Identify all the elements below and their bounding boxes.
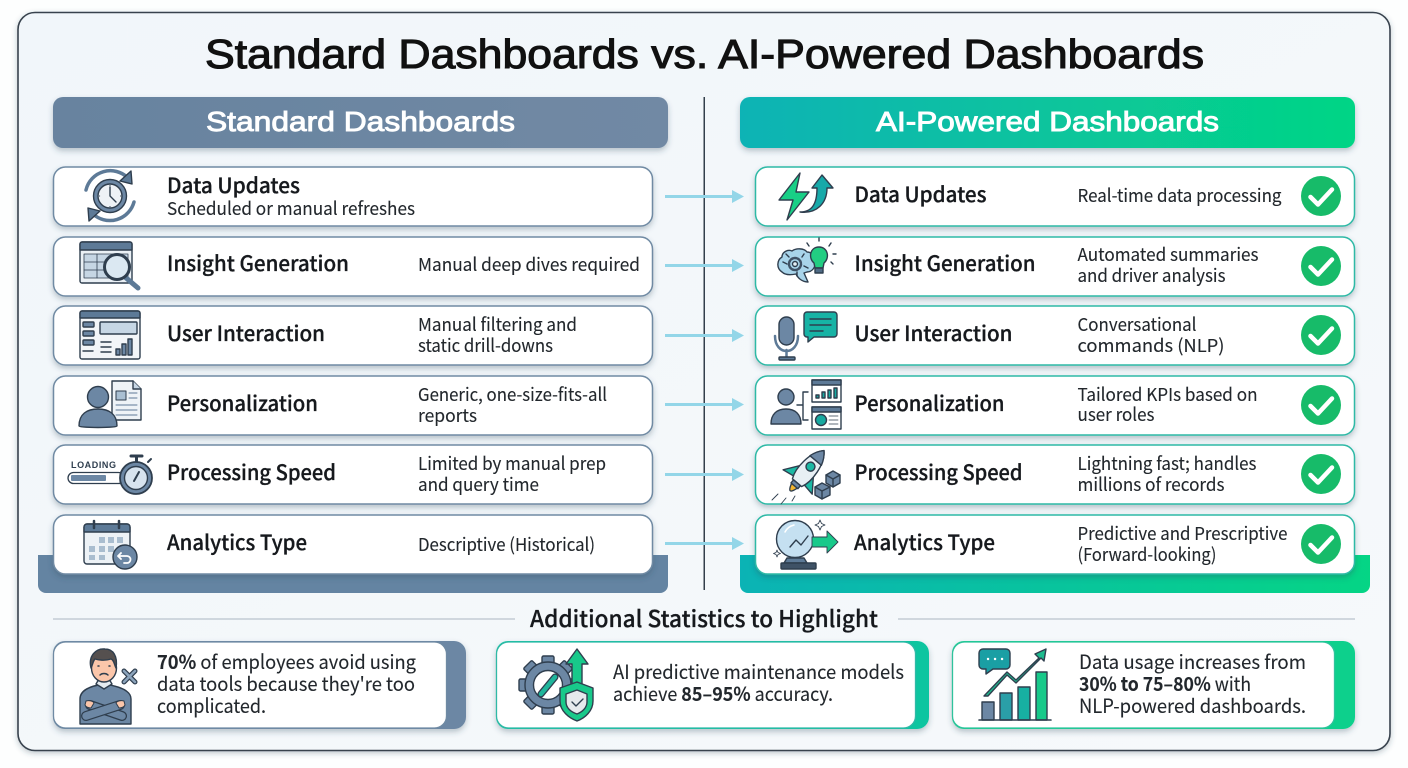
stat text: 70% of employees avoid using (157, 646, 416, 675)
row: user interaction (standard) (54, 306, 652, 365)
row: insight generation (standard) (54, 237, 652, 296)
icon: check mark (1301, 246, 1341, 286)
stat text: complicated. (157, 690, 266, 719)
icon: rocket and cubes (772, 438, 840, 504)
description: Descriptive (Historical) (418, 531, 595, 557)
label: personalization: Personalization (167, 388, 318, 418)
heading: AI-powered dashboards: AI-Powered Dashboards (876, 106, 1219, 137)
icon: brain with light bulb (778, 238, 836, 282)
description: (Forward-looking) (1078, 541, 1216, 567)
icon: check mark (1301, 315, 1341, 355)
description: reports (418, 402, 477, 428)
description (418, 311, 577, 358)
label: processing speed: Processing Speed (854, 457, 1022, 487)
label: analytics type: Analytics Type (854, 527, 995, 557)
icon: crystal ball with forecast arrow (774, 520, 838, 569)
icon: lightning bolt and arrow (779, 173, 833, 220)
row: personalization (standard) (54, 376, 652, 435)
description (1078, 381, 1258, 427)
description: Manual filtering and (418, 311, 577, 337)
stat text (157, 646, 416, 719)
label: analytics type: Analytics Type (167, 527, 307, 557)
stat text (613, 656, 904, 707)
row: data updates (AI) (756, 167, 1354, 226)
label: processing speed: Processing Speed (167, 457, 336, 487)
description: Generic, one-size-fits-all (418, 381, 607, 407)
label: data updates: Data Updates (854, 179, 986, 209)
label: insight generation: Insight Generation (854, 248, 1036, 278)
icon: microphone and chat bubble (775, 312, 837, 360)
description: Scheduled or manual refreshes (167, 195, 415, 221)
description (1078, 241, 1258, 288)
panel: AI-powered dashboards column (740, 97, 1370, 593)
description (418, 381, 607, 428)
stat text: NLP-powered dashboards. (1079, 690, 1306, 719)
icon: check mark (1301, 454, 1341, 494)
stat text: achieve 85–95% accuracy. (613, 678, 833, 707)
icon: rising bar chart with chat bubble (979, 649, 1051, 720)
panel: standard dashboards column (38, 97, 668, 593)
arrow: row 6 (665, 537, 744, 550)
arrows: standard to AI (665, 190, 744, 550)
description (1078, 450, 1256, 497)
row: insight generation (AI) (756, 237, 1354, 296)
arrow: row 5 (665, 468, 744, 481)
description: Conversational (1078, 311, 1196, 337)
column base: AI (740, 555, 1370, 593)
column base: standard (38, 555, 668, 593)
label: data updates: Data Updates (167, 170, 300, 200)
arrow: row 4 (665, 398, 744, 411)
row: analytics type (AI) (756, 515, 1354, 574)
arrow: row 3 (665, 329, 744, 342)
description: Limited by manual prep (418, 450, 606, 476)
description: Real-time data processing (1078, 182, 1282, 208)
description: Automated summaries (1078, 241, 1258, 267)
icon: dashboard window (80, 311, 140, 359)
icon: loading bar with stopwatch: LOADING (71, 460, 116, 470)
description: user roles (1078, 401, 1154, 427)
description: commands (NLP) (1078, 332, 1224, 358)
description (418, 450, 606, 497)
description: Lightning fast; handles (1078, 450, 1256, 476)
description: and driver analysis (1078, 262, 1226, 288)
stat text: AI predictive maintenance models (613, 656, 904, 685)
heading: AI-powered dashboards (740, 97, 1355, 148)
row: user interaction (AI) (756, 306, 1354, 365)
description: Tailored KPIs based on (1078, 381, 1258, 407)
description: and query time (418, 471, 539, 497)
icon: person with tailored panels (771, 380, 841, 429)
description: Manual deep dives required (418, 251, 640, 277)
description: millions of records (1078, 471, 1224, 497)
icon: loading bar with stopwatch (68, 456, 152, 494)
description (1078, 520, 1288, 567)
arrow: row 1 (665, 190, 744, 203)
description (1078, 311, 1224, 358)
label: insight generation: Insight Generation (167, 248, 349, 278)
arrow: row 2 (665, 259, 744, 272)
heading: standard dashboards (53, 97, 668, 148)
stat card: employees avoid data tools (53, 641, 466, 729)
center divider line (704, 97, 705, 590)
label: user interaction: User Interaction (167, 318, 325, 348)
icon: gear with wrench, arrow and shield (519, 649, 593, 721)
icon: check mark (1301, 176, 1341, 216)
stat text: Data usage increases from (1079, 646, 1306, 675)
stat text: data tools because they're too (157, 668, 415, 697)
row: processing speed (standard) (54, 445, 652, 504)
label: personalization: Personalization (854, 388, 1004, 418)
heading: additional statistics: Additional Statistics to Highlight (530, 600, 878, 634)
row: data updates (standard) (54, 167, 652, 226)
description: Predictive and Prescriptive (1078, 520, 1288, 546)
stat card: predictive maintenance accuracy (496, 641, 929, 729)
row: analytics type (standard) (54, 515, 652, 574)
icon: person with document (79, 381, 141, 428)
icon: frustrated person with crossed arms (80, 649, 135, 724)
icon: table with magnifier (80, 242, 138, 288)
stat text (1079, 646, 1306, 719)
stat card: data usage increase (952, 641, 1355, 729)
row: processing speed (AI) (756, 438, 1354, 504)
heading: standard dashboards: Standard Dashboards (206, 106, 515, 137)
label: user interaction: User Interaction (854, 318, 1012, 348)
stat text: 30% to 75–80% with (1079, 668, 1251, 697)
icon: clock with refresh arrows (86, 171, 134, 221)
description: static drill-downs (418, 332, 553, 358)
row: personalization (AI) (756, 376, 1354, 435)
title: Standard Dashboards vs. AI-Powered Dashboards (205, 31, 1204, 77)
icon: check mark (1301, 524, 1341, 564)
icon: calendar with history arrow (84, 521, 137, 569)
icon: check mark (1301, 385, 1341, 425)
